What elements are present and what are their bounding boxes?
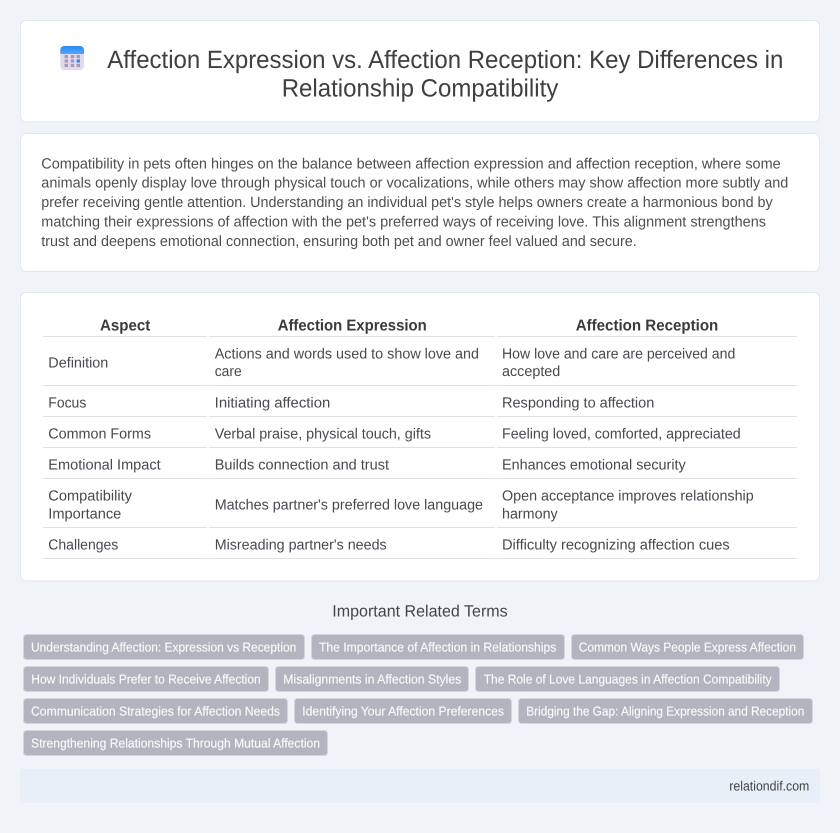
tag: Strengthening Relationships Through Mutual Affection (31, 735, 320, 750)
title: Relationship Compatibility (282, 74, 559, 102)
related term tags (24, 634, 812, 756)
tag (24, 634, 304, 660)
row: definition (43, 346, 797, 386)
title: Affection Expression vs. Affection Reception: Key Differences in (107, 46, 783, 74)
row: challenges (43, 537, 797, 559)
tag: How Individuals Prefer to Receive Affection (31, 671, 261, 686)
row: emotional impact (43, 457, 797, 479)
tag: The Importance of Affection in Relationships (319, 639, 556, 654)
table header: Affection Expression (278, 318, 427, 335)
row: compatibility importance: Matches partner's preferred love language (215, 497, 483, 513)
table header: Aspect (100, 318, 151, 335)
heading: important related terms: Important Related Terms (332, 603, 508, 621)
tag (276, 666, 468, 692)
row: emotional impact: Builds connection and trust (215, 457, 389, 473)
row: emotional impact: Enhances emotional security (502, 457, 686, 473)
row: common forms: Feeling loved, comforted, appreciated (502, 426, 741, 442)
tag (476, 666, 780, 692)
panel: intro paragraph: Compatibility in pets often hinges on the balance between affection expression and affection reception, where some (41, 156, 781, 172)
panel: intro paragraph: trust and deepens emotional connection, ensuring both pet and owner feel valued and secure. (41, 234, 637, 250)
tag: Common Ways People Express Affection (579, 639, 796, 654)
tag: Identifying Your Affection Preferences (302, 703, 504, 718)
panel: intro paragraph: matching their expressions of affection with the pet's preferred ways of receiving love. This alignment strengthens (41, 215, 766, 231)
tag: Communication Strategies for Affection Needs (31, 703, 280, 718)
panel: title card (20, 20, 820, 122)
table header (43, 318, 797, 337)
table header: Affection Reception (576, 318, 718, 335)
row: emotional impact: Emotional Impact (48, 457, 161, 473)
title (107, 46, 783, 102)
panel: comparison table (20, 292, 820, 581)
row: compatibility importance (43, 489, 797, 528)
row: compatibility importance: Compatibility (48, 489, 133, 505)
tag (518, 698, 812, 724)
tag (572, 634, 804, 660)
row: definition: Actions and words used to show love and (215, 346, 479, 362)
row: focus: Responding to affection (502, 395, 654, 411)
row: compatibility importance: Importance (48, 506, 121, 522)
tag: Bridging the Gap: Aligning Expression and Reception (526, 703, 804, 718)
row: compatibility importance: harmony (502, 506, 558, 522)
row: focus: Focus (48, 395, 86, 411)
row: focus (43, 395, 797, 417)
tag: Misalignments in Affection Styles (283, 671, 461, 686)
row: definition: accepted (502, 364, 560, 380)
tag (312, 634, 564, 660)
panel: intro paragraph: animals openly display love through physical touch or vocalizations, while others may show affection more subtly and (41, 176, 788, 192)
row: challenges: Difficulty recognizing affection cues (502, 537, 730, 553)
row: definition: care (215, 364, 242, 380)
tag (294, 698, 512, 724)
row: common forms: Common Forms (48, 426, 151, 442)
row: common forms: Verbal praise, physical touch, gifts (215, 426, 431, 442)
row: compatibility importance: Open acceptance improves relationship (502, 489, 754, 505)
row: common forms (43, 426, 797, 448)
panel: intro paragraph (20, 134, 820, 272)
footer band: relationdif.com (729, 778, 809, 793)
tag (24, 698, 288, 724)
tag: The Role of Love Languages in Affection Compatibility (484, 671, 772, 686)
row: challenges: Misreading partner's needs (215, 537, 387, 553)
row: definition: How love and care are perceived and (502, 346, 735, 362)
row: definition: Definition (48, 355, 108, 371)
panel: intro paragraph: prefer receiving gentle attention. Understanding an individual pet's style helps owners create a harmonious bond by (41, 195, 773, 211)
tag (24, 730, 328, 756)
row: challenges: Challenges (48, 537, 118, 553)
row: focus: Initiating affection (215, 395, 330, 411)
footer band (20, 769, 820, 803)
tag (24, 666, 268, 692)
tag: Understanding Affection: Expression vs Reception (31, 639, 296, 654)
icon: calendar (60, 46, 84, 70)
